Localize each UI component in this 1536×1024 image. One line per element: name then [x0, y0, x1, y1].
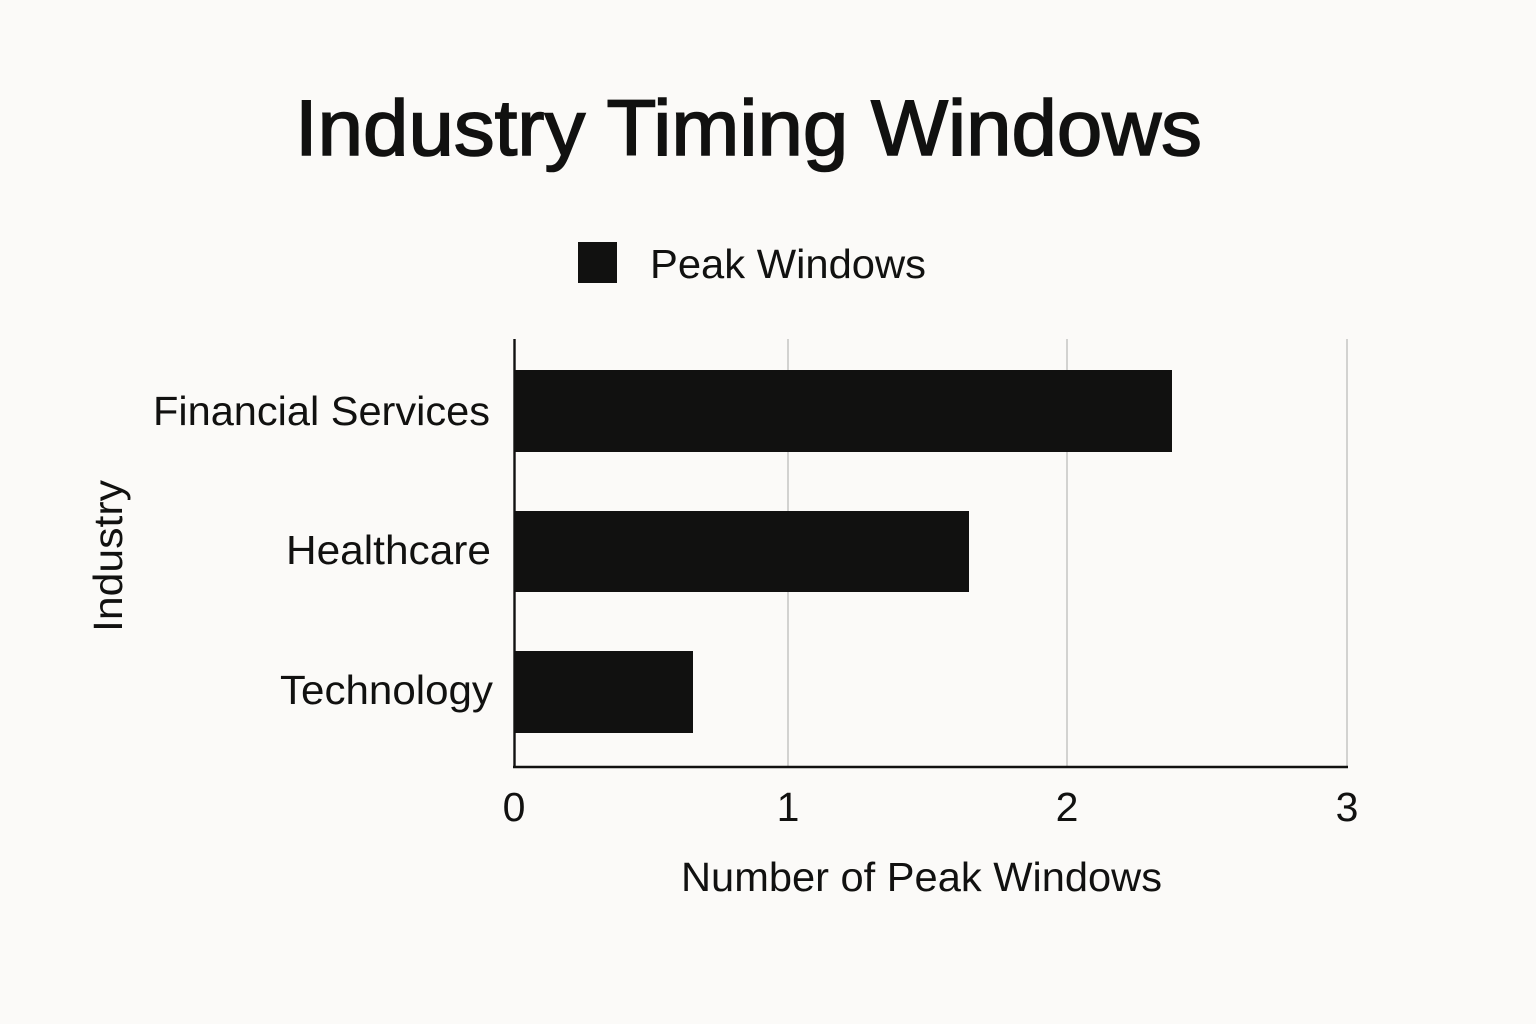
- bar: Technology: [515, 651, 693, 733]
- category label: Healthcare: Healthcare: [286, 527, 491, 573]
- tick label 0: 0: [503, 784, 525, 830]
- bar: Financial Services: [515, 370, 1172, 452]
- tick label 1: 1: [777, 784, 799, 830]
- x axis title: Number of Peak Windows: [681, 854, 1162, 900]
- title: Industry Timing Windows: [295, 83, 1202, 172]
- legend: [578, 241, 926, 287]
- y axis title: Industry: [85, 479, 131, 632]
- bar: Healthcare: [515, 511, 969, 592]
- legend swatch: [578, 242, 617, 283]
- category label: Technology: Technology: [280, 667, 493, 713]
- tick label 3: 3: [1336, 784, 1358, 830]
- bar chart: [85, 339, 1358, 900]
- legend label: Peak Windows: [650, 241, 926, 287]
- category label: Financial Services: Financial Services: [153, 388, 490, 434]
- tick label 2: 2: [1056, 784, 1078, 830]
- y axis line: [513, 339, 516, 768]
- x axis line: [513, 766, 1348, 768]
